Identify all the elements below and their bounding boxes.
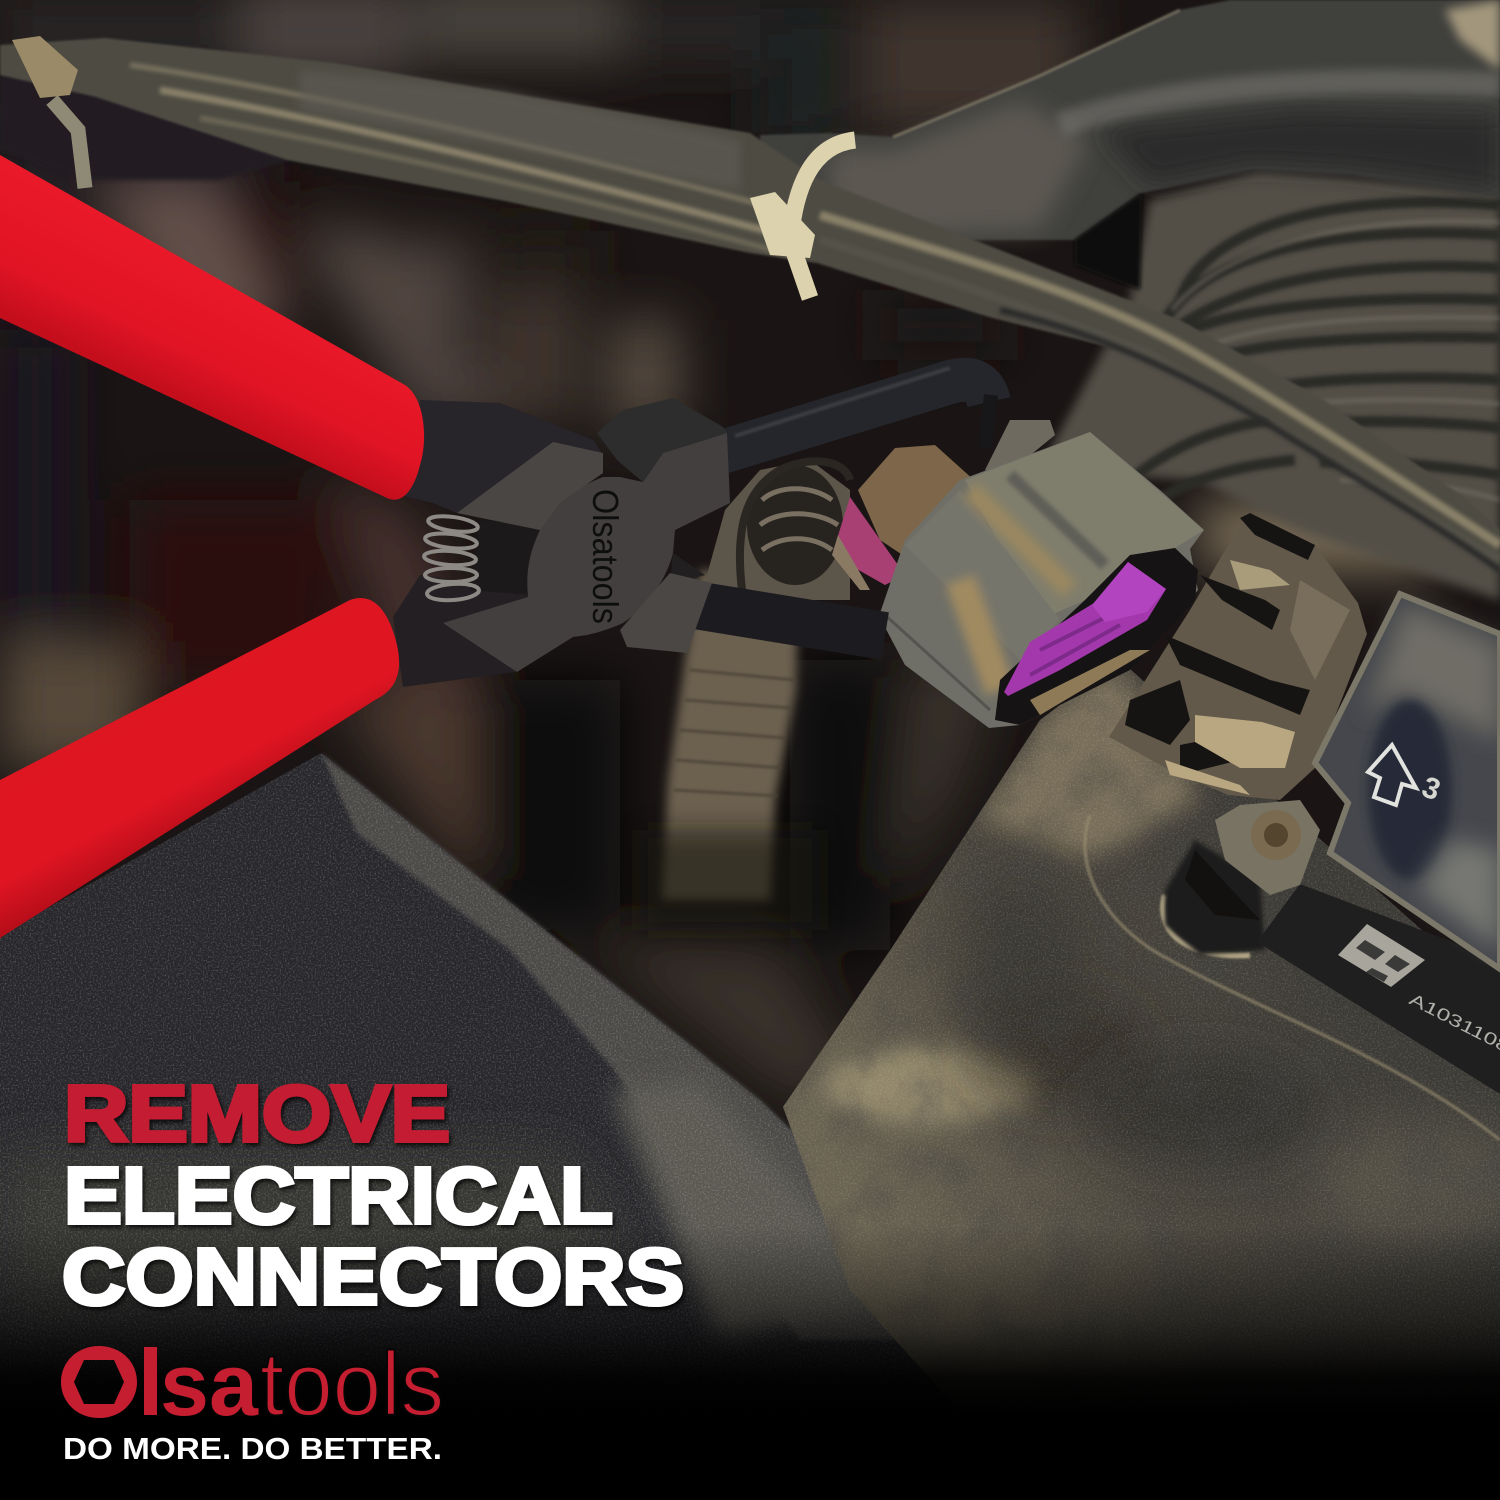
upper jaw blade — [457, 442, 603, 530]
wiring harness bundle — [0, 38, 1500, 570]
upper right block — [597, 398, 727, 482]
sensor mounting bracket — [1109, 513, 1367, 800]
pink locking tab — [832, 497, 905, 585]
connector rear tan section — [858, 445, 990, 570]
sensor plate — [1315, 594, 1500, 969]
headline — [62, 1069, 684, 1321]
grey connector shell — [879, 432, 1204, 728]
upper arm casting — [400, 400, 603, 513]
upper red grip — [0, 155, 424, 500]
logo: letter l — [144, 1347, 157, 1415]
coiled conduit behind pliers — [640, 460, 850, 930]
part number: A1031108 — [1406, 990, 1500, 1057]
spring — [424, 514, 479, 602]
pliers — [0, 155, 991, 938]
embossed digit: 3 — [1418, 771, 1445, 807]
logo: hex O mark — [61, 1346, 137, 1418]
zip ties — [12, 36, 855, 298]
data matrix code — [1338, 924, 1425, 987]
Olsatools logo — [61, 1335, 444, 1435]
main jaw body — [443, 433, 730, 672]
logo: letters sa: sa — [160, 1335, 259, 1434]
connector opening — [995, 548, 1198, 725]
engine sensor with bracket — [1109, 513, 1500, 1094]
logo: letters tools: tools — [260, 1335, 444, 1435]
engraved pliers logo: Olsatools — [585, 489, 626, 624]
tool tip lower arm — [695, 605, 885, 636]
tool tip upper arm — [722, 368, 991, 452]
tagline: DO MORE. DO BETTER. — [63, 1431, 442, 1466]
jaw gap interior — [470, 520, 540, 595]
wedge behind lower blade — [670, 553, 705, 585]
purple connector insert — [1004, 562, 1166, 696]
headline line: electrical: ELECTRICAL — [64, 1151, 613, 1240]
bolt with collar — [1215, 800, 1320, 895]
lower red grip — [0, 598, 399, 938]
large intake tube, lower right — [783, 670, 1500, 1374]
lower arm casting — [393, 575, 530, 687]
electrical connector — [832, 420, 1204, 728]
bottom black fade — [0, 1225, 1500, 1500]
headline line: remove: REMOVE — [64, 1069, 450, 1158]
corrugated air duct, upper right — [1040, 170, 1500, 600]
headline line: connectors: CONNECTORS — [62, 1232, 684, 1321]
dark ribbed hose, upper left — [0, 70, 290, 180]
hose, upper right — [760, 0, 1500, 290]
embossed arrow — [1368, 745, 1416, 805]
sensor lower black body — [1257, 884, 1500, 1094]
lower right blade — [620, 573, 712, 653]
plastic cover, lower left — [0, 753, 916, 1368]
